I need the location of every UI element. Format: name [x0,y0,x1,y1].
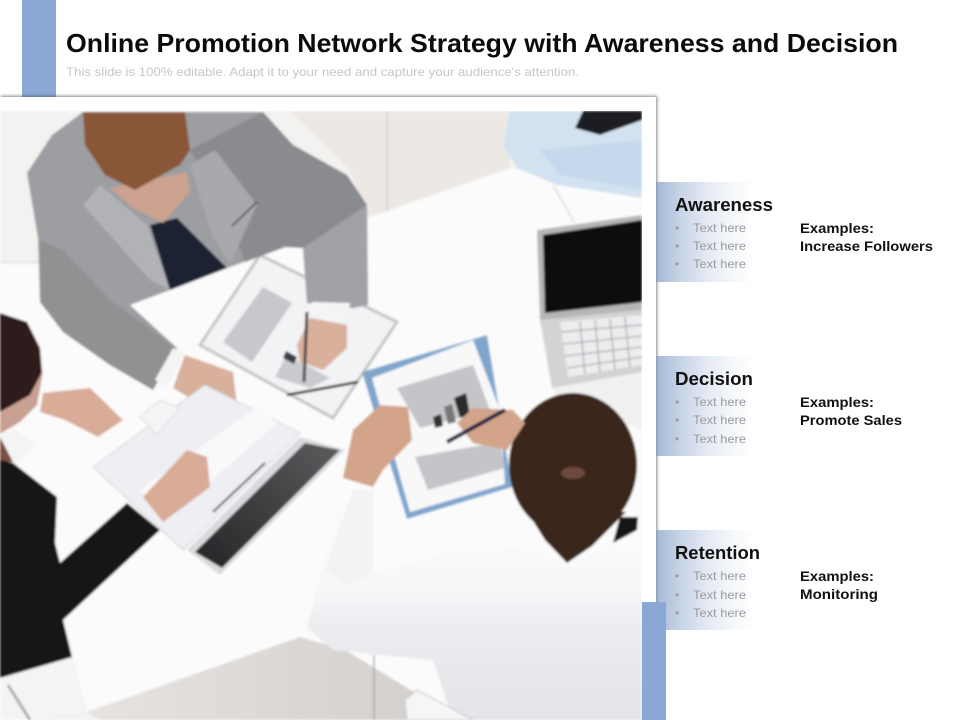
man in grey suit: jacket [27,112,368,390]
photo frame [0,97,656,720]
retention text: Text here [693,606,746,620]
awareness text: Awareness [675,195,773,215]
awareness text: Increase Followers [800,238,933,254]
center laptop [93,385,300,550]
table [0,168,642,720]
bottom accent bar [642,602,666,720]
awareness text [675,195,933,271]
head: brown hair [83,112,190,190]
decision text: • [675,413,679,427]
his hands and pen [343,405,412,487]
top accent bar [22,0,56,97]
woman's hands [40,388,123,437]
retention text: • [675,569,679,583]
floor top [0,111,642,720]
awareness text: • [675,221,679,235]
retention text [675,543,878,620]
retention text: Examples: [800,568,874,584]
man in white shirt [307,480,642,720]
chair back [405,690,473,720]
woman's collar [0,428,36,465]
folder with charts [362,335,512,519]
decision text: Promote Sales [800,412,902,428]
left paper with chart [200,255,397,418]
retention text: • [675,588,679,602]
head: dark hair [509,393,637,563]
decision text: Decision [675,369,753,389]
right laptop [540,308,642,430]
woman's jacket [0,460,160,678]
awareness text: • [675,257,679,271]
panel: retention band [656,530,756,630]
panel: decision band [656,356,756,456]
retention text: Retention [675,543,760,563]
awareness text: • [675,239,679,253]
face [110,172,190,223]
decision text: Text here [693,432,746,446]
decision text [675,369,902,446]
awareness text: Text here [693,257,746,271]
photo: business team meeting around a table [0,111,642,720]
woman: hair and face [0,372,43,434]
retention text: • [675,606,679,620]
retention text: Monitoring [800,586,878,602]
floor bottom [87,637,460,720]
decision text: • [675,395,679,409]
awareness text: Text here [693,221,746,235]
decision text: Text here [693,413,746,427]
awareness text: Text here [693,239,746,253]
phone [613,517,638,543]
retention text: Text here [693,569,746,583]
decision text: Text here [693,395,746,409]
person top right: blue shirt [503,111,642,198]
subtitle: This slide is 100% editable. Adapt it to your need and capture your audience's attention. [66,65,579,79]
shirt and tie [150,218,227,290]
decision text: • [675,432,679,446]
retention text: Text here [693,588,746,602]
title: Online Promotion Network Strategy with Awareness and Decision [66,28,898,58]
man's cuffs and hands [155,348,185,387]
panel: awareness band [656,182,756,282]
awareness text: Examples: [800,220,874,236]
decision text: Examples: [800,394,874,410]
